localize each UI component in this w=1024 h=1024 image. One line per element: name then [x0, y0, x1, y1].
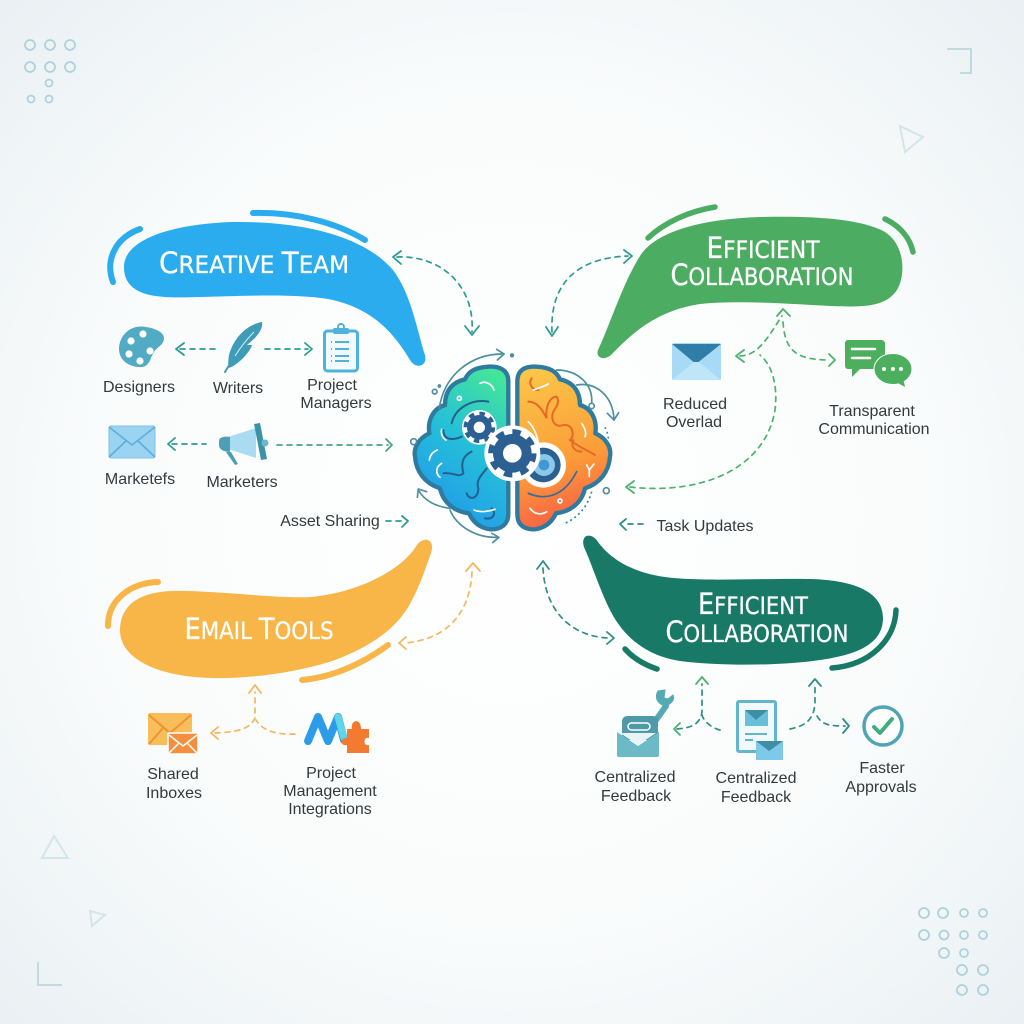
label: task updates: Task Updates: [657, 518, 753, 535]
circular arrows: [417, 349, 619, 543]
heading: efficient collaboration: EFFICIENT: [706, 231, 820, 265]
panel: efficient collaboration top: [597, 207, 913, 358]
label: shared inboxes: [146, 766, 202, 802]
label: reduced overlad: Overlad: [666, 414, 722, 431]
label: faster approvals: Approvals: [845, 779, 917, 796]
label: project management integrations: Integrations: [288, 801, 372, 818]
label: project management integrations: Project: [306, 765, 356, 782]
icon: palette: [119, 327, 164, 367]
label: shared inboxes: Shared: [147, 766, 199, 783]
panel: email tools blob: [108, 540, 432, 680]
label: project managers: Project: [307, 377, 357, 394]
label: shared inboxes: Inboxes: [146, 785, 202, 802]
gear: main center: [484, 425, 540, 481]
decoration: dots top left: [25, 40, 75, 102]
brain right lobe: [517, 367, 610, 529]
label: reduced overlad: [663, 396, 727, 431]
heading: email tools: EMAIL TOOLS: [184, 612, 334, 646]
left folds: [443, 401, 494, 519]
label: project managers: Managers: [300, 395, 372, 412]
decoration: bracket top right: [947, 49, 971, 73]
arrows: email tools connections: [211, 563, 480, 739]
right highlights: [528, 384, 594, 514]
gear: left small: [462, 410, 497, 445]
icon: envelope dark flap: [672, 343, 721, 380]
panel: efficient collaboration bottom: [583, 536, 896, 669]
label: asset sharing: Asset Sharing: [280, 513, 380, 530]
brain left lobe: [415, 367, 508, 529]
icon: feather: [225, 322, 262, 372]
icon: megaphone: [219, 423, 268, 465]
label: project management integrations: [283, 765, 377, 818]
label: centralized feedback center: Feedback: [721, 789, 792, 806]
icon: document with envelope: [738, 702, 783, 760]
heading: efficient collaboration bottom: COLLABORATION: [666, 615, 848, 649]
label: transparent communication: Transparent: [829, 403, 915, 420]
icon: robot envelope with wrench: [617, 690, 674, 757]
heading: efficient collaboration bottom: [666, 587, 848, 649]
arrows: creative team connections: [168, 251, 479, 527]
decoration: triangle lower left: [90, 911, 105, 926]
label: centralized feedback center: Centralized: [716, 770, 796, 787]
decoration: triangle bottom left: [42, 836, 68, 858]
heading: efficient collaboration: COLLABORATION: [670, 258, 854, 292]
left highlights: [429, 382, 495, 512]
heading: creative team: CREATIVE TEAM: [159, 246, 349, 280]
icon: clipboard: [324, 324, 358, 371]
panel: creative team blob: [110, 213, 425, 366]
label: faster approvals: [845, 760, 917, 796]
heading: efficient collaboration bottom: EFFICIENT: [698, 587, 808, 621]
label: transparent communication: Communication: [818, 421, 930, 438]
label: project managers: [300, 377, 372, 412]
gear: right light: [521, 442, 566, 488]
right lower fold: [528, 472, 577, 497]
central brain with gears: [411, 349, 619, 543]
label: faster approvals: Faster: [859, 760, 905, 777]
label: transparent communication: [818, 403, 930, 438]
right folds: [528, 378, 595, 455]
label: writers: Writers: [213, 380, 263, 397]
icon: integration logo and puzzle: [308, 717, 369, 753]
small circles and dots: [411, 354, 609, 524]
icon: chat bubbles: [845, 340, 912, 387]
label: reduced overlad: Reduced: [663, 396, 727, 413]
decoration: triangle top right: [900, 126, 923, 152]
label: centralized feedback center: [716, 770, 796, 806]
label: marketers: Marketers: [206, 474, 278, 491]
arrows: task updates: [537, 519, 849, 735]
decoration: dots bottom right: [919, 908, 988, 995]
decoration: bracket bottom left: [38, 962, 62, 985]
icon: envelopes orange: [148, 713, 198, 754]
icon: envelope blue: [109, 426, 155, 458]
arrows: efficient collaboration connections: [546, 250, 835, 493]
heading: efficient collaboration: [670, 231, 854, 292]
label: centralized feedback left: Centralized: [595, 769, 675, 786]
label: centralized feedback left: [595, 769, 675, 805]
label: project management integrations: Management: [283, 783, 377, 800]
label: centralized feedback left: Feedback: [601, 788, 672, 805]
label: designers: Designers: [103, 379, 175, 396]
label: marketefs: Marketefs: [105, 471, 175, 488]
icon: check circle: [864, 707, 902, 745]
